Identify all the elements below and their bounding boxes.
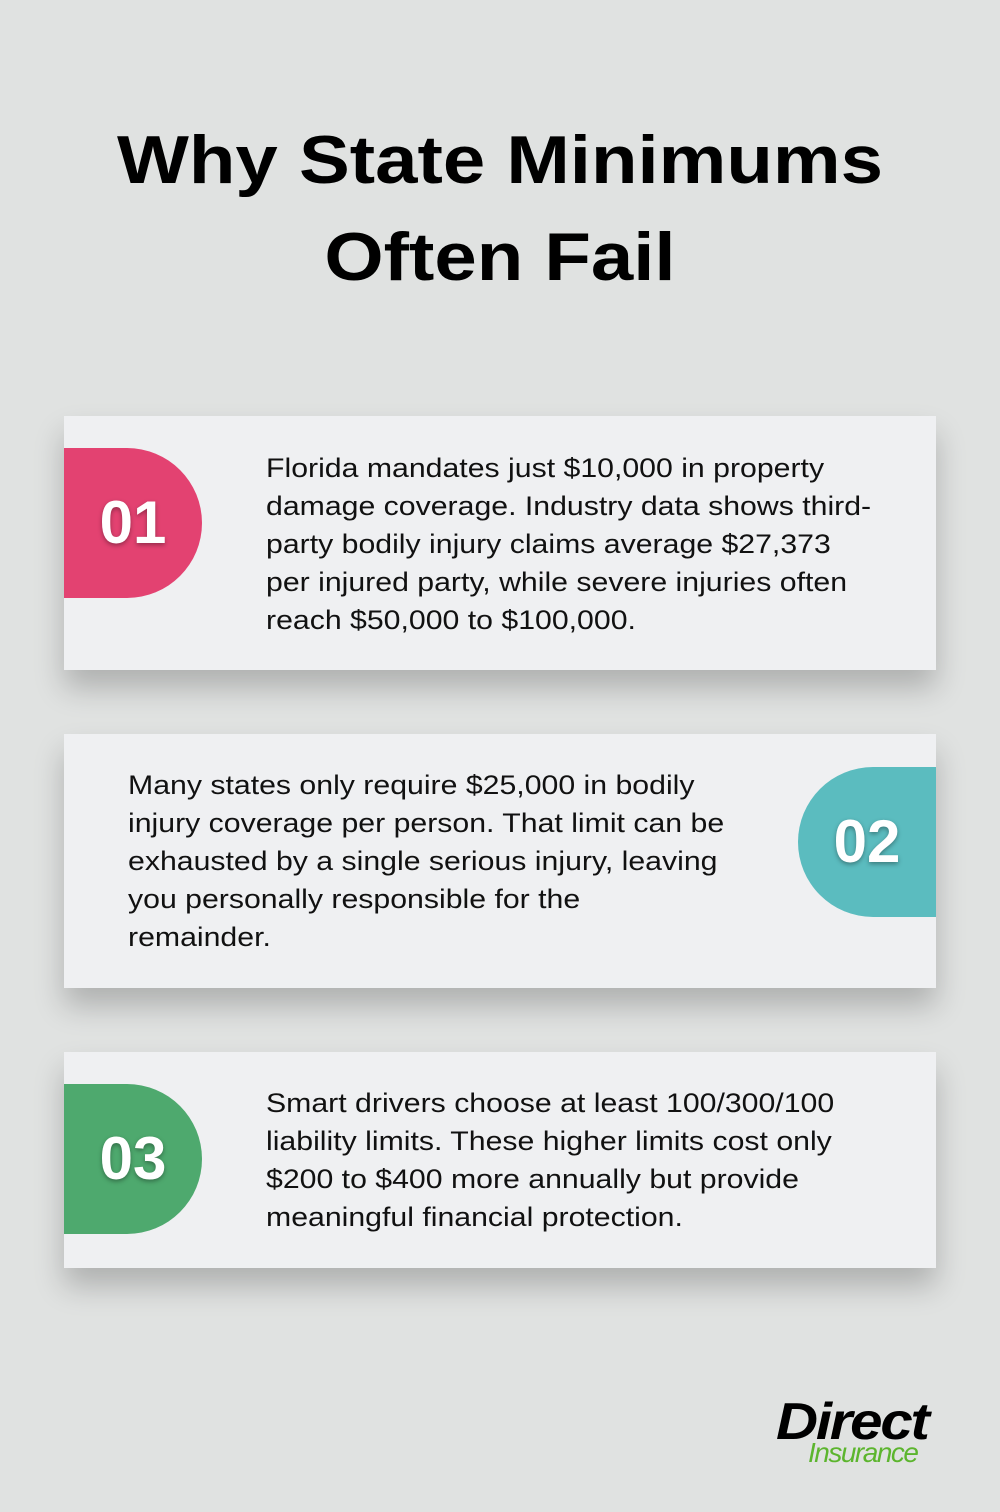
- text 1: party bodily injury claims average $27,373: [266, 529, 831, 559]
- text 1: reach $50,000 to $100,000.: [266, 605, 636, 635]
- text 3: meaningful financial protection.: [266, 1202, 683, 1232]
- text 3: liability limits. These higher limits cost only: [266, 1126, 832, 1156]
- text 2: remainder.: [128, 922, 271, 952]
- badge 02: 02: [834, 808, 900, 875]
- text 1: [266, 453, 871, 635]
- text 3: $200 to $400 more annually but provide: [266, 1164, 799, 1194]
- text 2: injury coverage per person. That limit can be: [128, 808, 724, 838]
- title: Often Fail: [324, 219, 676, 295]
- badge 01: [64, 448, 202, 598]
- panel: card 2: [64, 734, 936, 988]
- panel: card 1: [64, 416, 936, 670]
- panel: card 3: [64, 1052, 936, 1268]
- logo: Direct: [776, 1393, 928, 1451]
- title: [117, 122, 883, 295]
- text 3: [266, 1088, 834, 1232]
- text 1: Florida mandates just $10,000 in property: [266, 453, 824, 483]
- text 2: you personally responsible for the: [128, 884, 580, 914]
- text 2: exhausted by a single serious injury, leaving: [128, 846, 717, 876]
- text 1: per injured party, while severe injuries often: [266, 567, 847, 597]
- badge 03: [64, 1084, 202, 1234]
- text 2: [128, 770, 724, 952]
- text 1: damage coverage. Industry data shows third-: [266, 491, 871, 521]
- badge 02: [798, 767, 936, 917]
- title: Why State Minimums: [117, 122, 883, 198]
- badge 03: 03: [100, 1125, 166, 1192]
- text 3: Smart drivers choose at least 100/300/100: [266, 1088, 834, 1118]
- logo: Insurance: [808, 1437, 917, 1468]
- badge 01: 01: [100, 489, 166, 556]
- text 2: Many states only require $25,000 in bodily: [128, 770, 695, 800]
